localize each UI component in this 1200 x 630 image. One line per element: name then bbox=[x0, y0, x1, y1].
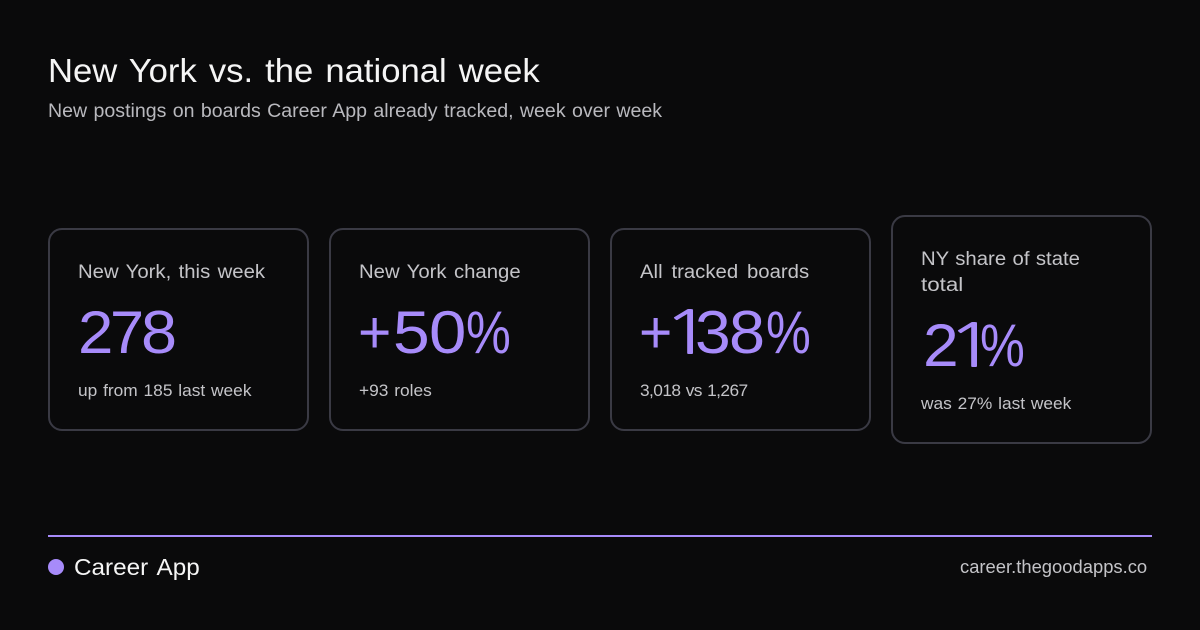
value: 3 bbox=[694, 299, 730, 366]
value bbox=[78, 299, 177, 366]
panel: NY share of state total bbox=[891, 215, 1152, 444]
note: +93 roles bbox=[359, 382, 432, 400]
value: 7 bbox=[110, 299, 144, 366]
value: + bbox=[358, 299, 391, 366]
panel: New York change bbox=[329, 228, 590, 431]
note: 3,018 vs 1,267 bbox=[640, 382, 748, 400]
value: 2 bbox=[78, 299, 114, 366]
label: New York change bbox=[359, 262, 521, 283]
panel: New York this week bbox=[48, 228, 309, 431]
title: New York vs. the national week bbox=[48, 52, 540, 89]
value bbox=[358, 299, 510, 366]
footer url: career.thegoodapps.co bbox=[960, 557, 1147, 577]
label bbox=[921, 249, 1080, 296]
value: 8 bbox=[729, 299, 765, 366]
value: 1 bbox=[946, 316, 997, 376]
value: % bbox=[980, 312, 1024, 379]
label: total bbox=[921, 275, 963, 296]
label: All tracked boards bbox=[640, 262, 809, 283]
value: 2 bbox=[922, 312, 958, 379]
value: % bbox=[466, 299, 510, 366]
value: % bbox=[766, 299, 810, 366]
note: up from 185 last week bbox=[78, 382, 251, 400]
value: 0 bbox=[429, 299, 466, 366]
brand name: Career App bbox=[74, 554, 200, 580]
label: New York, this week bbox=[78, 262, 265, 283]
value bbox=[639, 299, 810, 366]
value bbox=[922, 312, 1024, 379]
value: 5 bbox=[392, 299, 429, 366]
subtitle: New postings on boards Career App already tracked, week over week bbox=[48, 101, 662, 122]
value: + bbox=[639, 299, 672, 366]
note: was 27% last week bbox=[921, 395, 1071, 413]
label: NY share of state bbox=[921, 249, 1080, 270]
icon: brand dot bbox=[48, 559, 64, 575]
value: 1 bbox=[662, 303, 713, 363]
value: 8 bbox=[141, 299, 177, 366]
panel: All tracked boards bbox=[610, 228, 871, 431]
footer rule bbox=[48, 535, 1152, 537]
